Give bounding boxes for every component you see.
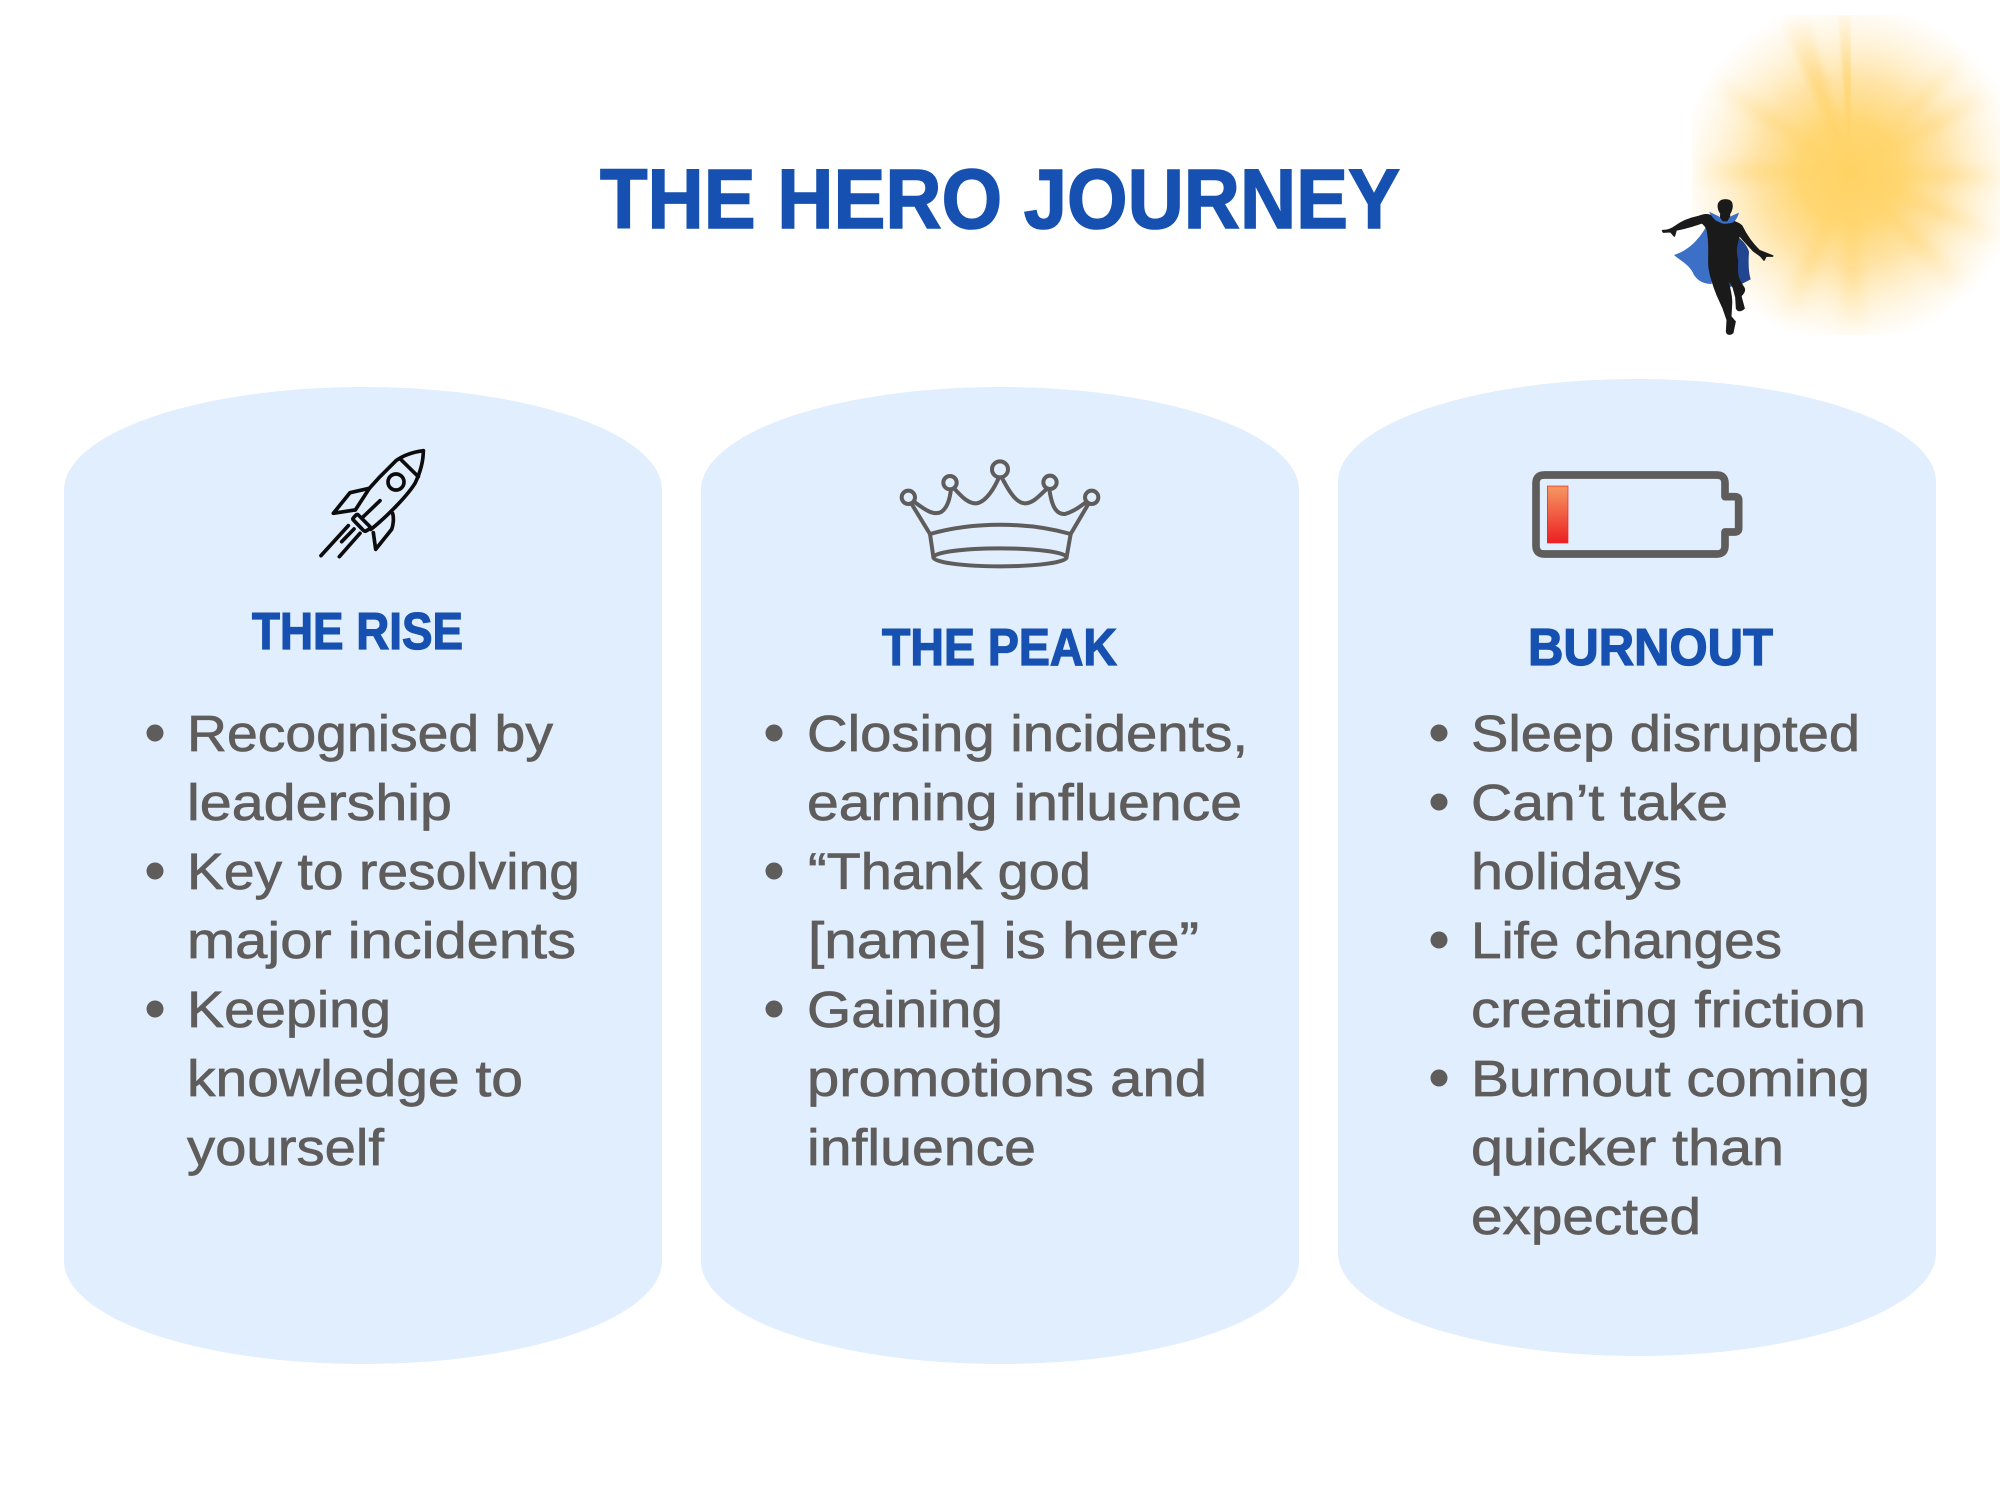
list: burnout: Life changes (1471, 912, 1782, 969)
list: the rise: Key to resolving (187, 843, 580, 900)
list: the peak: “Thank god (808, 843, 1091, 900)
list: burnout: Can’t take (1471, 774, 1728, 831)
list: burnout: quicker than (1471, 1119, 1784, 1176)
list: the peak: earning influence (807, 774, 1242, 831)
heading: the peak: THE PEAK (882, 619, 1117, 677)
list: the peak: [name] is here” (808, 912, 1199, 969)
list: the peak (766, 705, 1248, 1176)
panel background (64, 387, 662, 1364)
list: the peak: Gaining (807, 981, 1003, 1038)
panel: burnout (1338, 379, 1936, 1356)
collar (1709, 212, 1739, 224)
list: the rise: major incidents (187, 912, 576, 969)
panel: the rise (64, 387, 662, 1364)
list: burnout: creating friction (1471, 981, 1866, 1038)
title: THE HERO JOURNEY (600, 152, 1400, 246)
list: the rise: knowledge to (187, 1050, 523, 1107)
list: the peak: influence (807, 1119, 1036, 1176)
icon: flying hero (1663, 200, 1773, 334)
icon: rocket (321, 451, 423, 557)
list: the rise: leadership (187, 774, 452, 831)
list: burnout: expected (1471, 1188, 1701, 1245)
heading: the rise: THE RISE (252, 603, 463, 661)
list: the rise: yourself (187, 1119, 385, 1176)
panel background (1338, 379, 1936, 1356)
list: burnout: Sleep disrupted (1471, 705, 1860, 762)
panel background (701, 387, 1299, 1364)
icon: empty battery (1536, 475, 1739, 554)
list: the rise: Recognised by (187, 705, 554, 762)
list: the rise: Keeping (187, 981, 391, 1038)
heading: burnout: BURNOUT (1528, 619, 1773, 677)
list: burnout (1430, 705, 1870, 1245)
icon: crown (902, 461, 1098, 566)
list: the peak: Closing incidents, (807, 705, 1248, 762)
list: the peak: promotions and (807, 1050, 1207, 1107)
list: burnout: holidays (1471, 843, 1682, 900)
sharp vertical ray (1838, 16, 1851, 119)
cape lower (1720, 268, 1738, 288)
icon: sun glow (1692, 15, 2000, 335)
panel: the peak (701, 387, 1299, 1364)
cape left (1674, 228, 1712, 284)
list: burnout: Burnout coming (1471, 1050, 1870, 1107)
list: the rise (146, 705, 580, 1176)
cape right (1732, 233, 1751, 284)
silhouette (1663, 200, 1773, 334)
